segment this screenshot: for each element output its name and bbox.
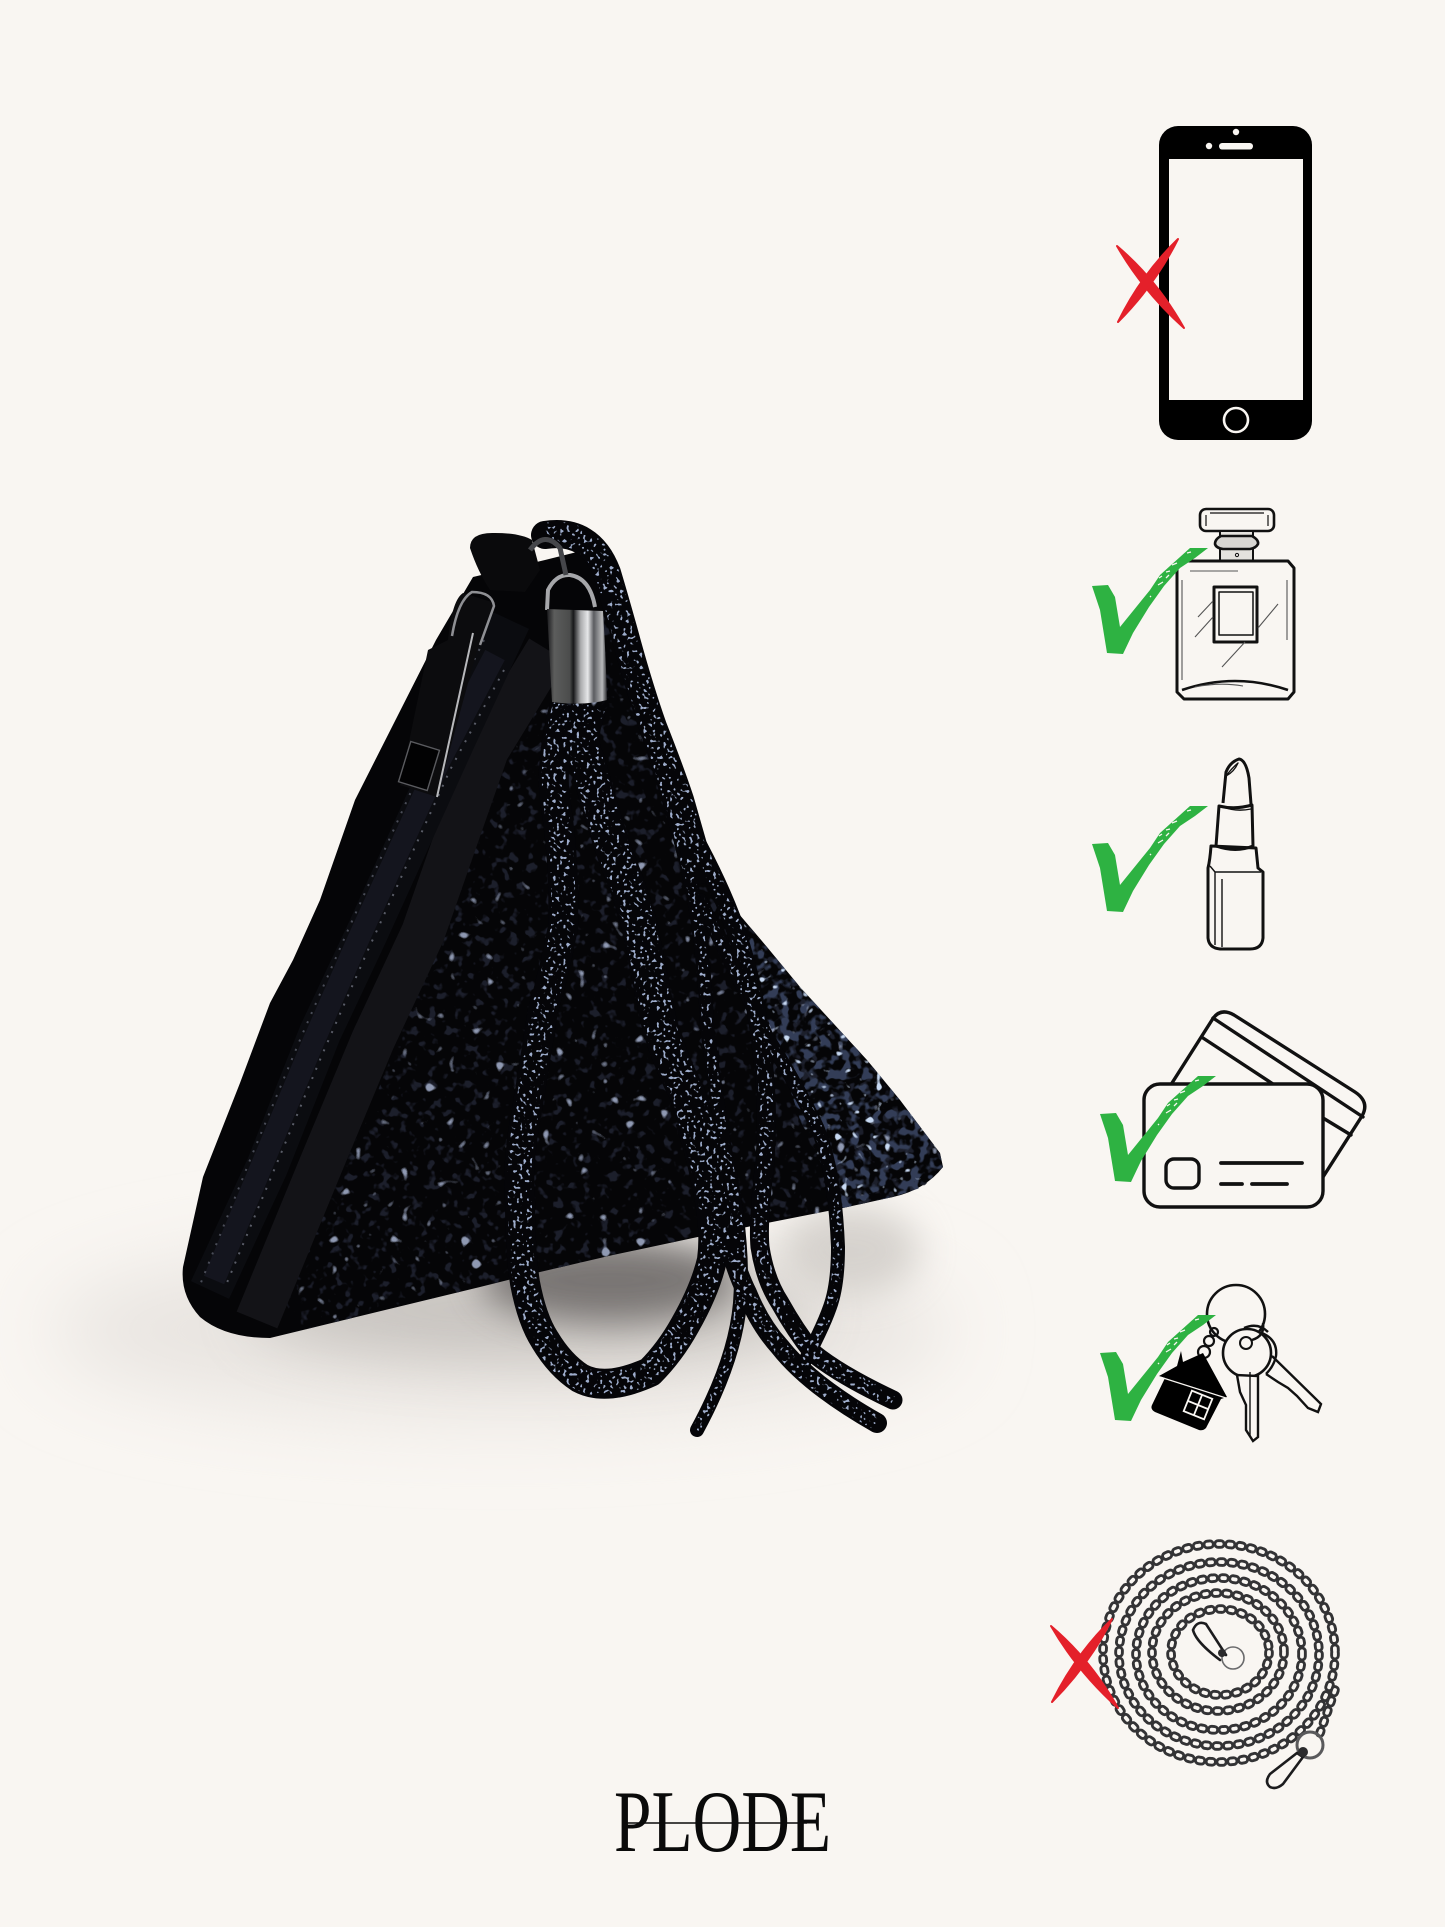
bag ground shadow: [50, 1205, 950, 1415]
cord: central braid and tail: [582, 705, 877, 1423]
icon: phone: [1159, 126, 1312, 440]
cord crystal sparkle: [507, 522, 895, 1431]
bag body: [183, 550, 943, 1338]
icon: red cross on phone: [1117, 239, 1184, 328]
icon: green check on lipstick: [1092, 806, 1208, 912]
icon: red cross on chain: [1051, 1619, 1118, 1708]
icon: bank cards: [1144, 1012, 1365, 1207]
icon: green check on cards: [1100, 1076, 1216, 1182]
infographic canvas: [78, 126, 1367, 1852]
rhinestone texture: [270, 600, 950, 1340]
suede top flap: [470, 533, 540, 592]
product photo: black crystal pyramid bag: [183, 510, 950, 1450]
icon: perfume bottle: [1177, 509, 1294, 699]
icon: lipstick: [1208, 759, 1263, 949]
icon: keys with house keyring: [1151, 1285, 1321, 1441]
zipper pull: [399, 592, 495, 797]
brand logo: PLODE: [614, 1774, 831, 1871]
suede trim and zipper tape: [200, 620, 548, 1320]
icon: green check on keys: [1100, 1315, 1216, 1421]
icon: coiled chain strap: [1103, 1544, 1335, 1788]
cord strands: [545, 534, 893, 1430]
icon: green check on perfume: [1092, 548, 1208, 654]
cord: braided loop: [519, 705, 713, 1384]
lock charm: [530, 539, 607, 704]
